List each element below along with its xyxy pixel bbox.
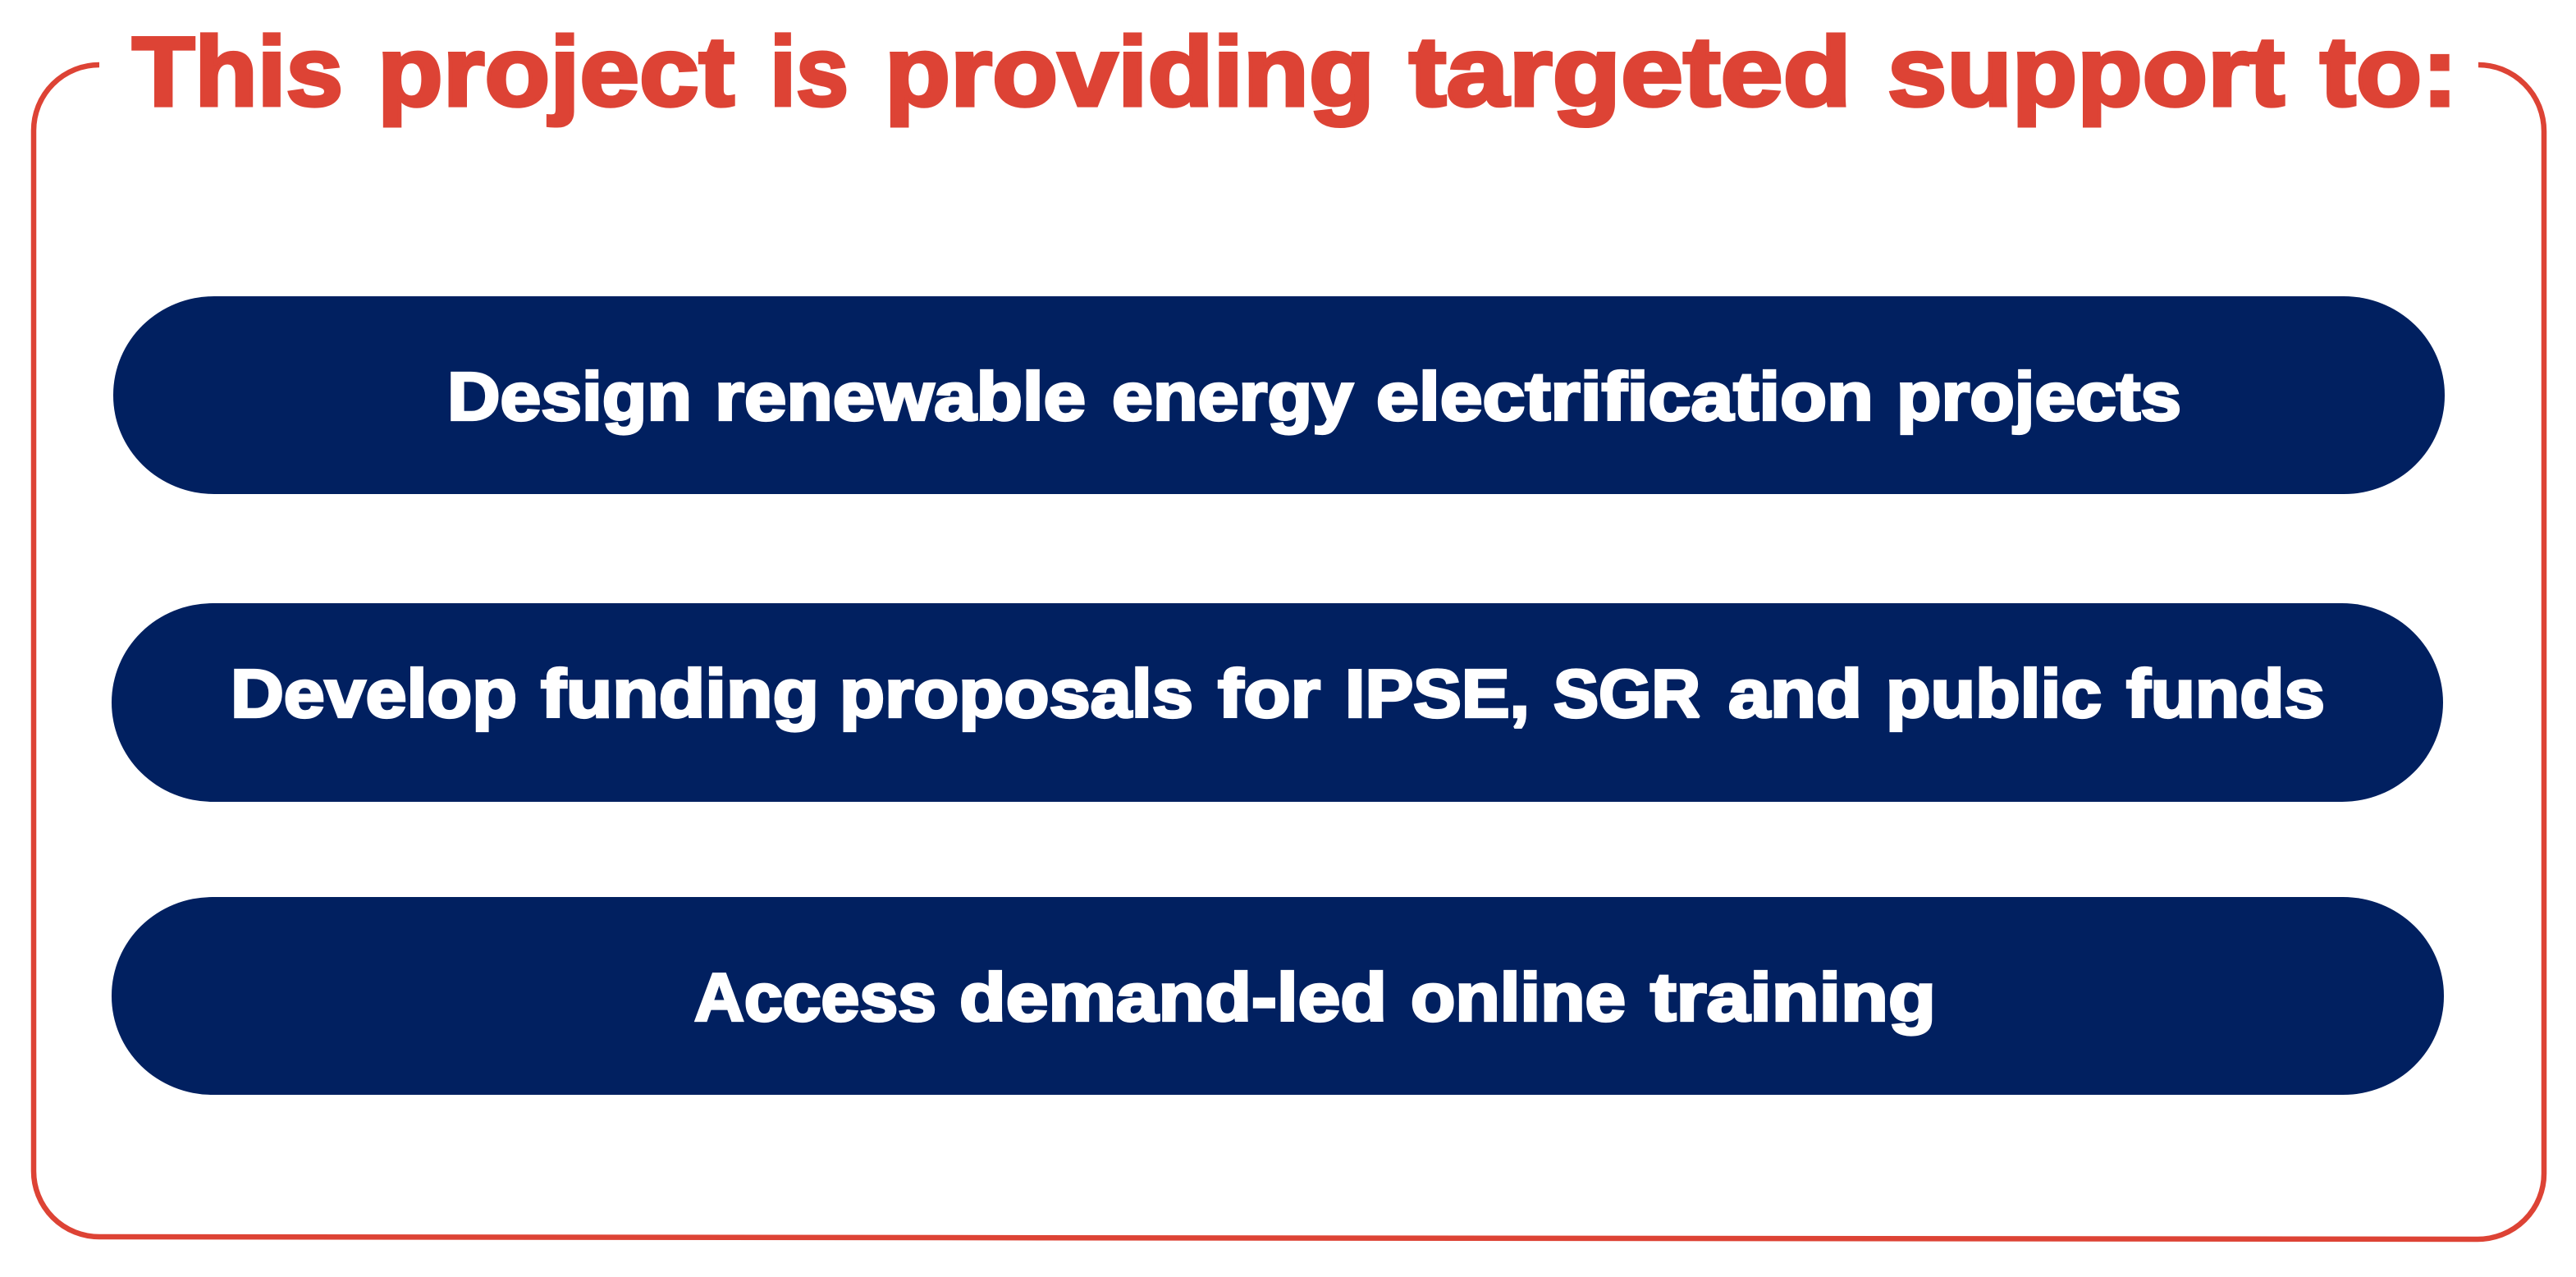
pill text: electrification: [1376, 358, 1874, 435]
title: This: [132, 16, 343, 126]
title: providing: [885, 16, 1375, 126]
pill text: online: [1411, 959, 1626, 1036]
title: to:: [2320, 16, 2458, 126]
pill text: Design: [447, 358, 692, 435]
panel: design projects pill: [113, 296, 2445, 494]
panel: online training pill: [112, 897, 2444, 1095]
pill text: funding: [541, 655, 819, 732]
pill text: projects: [1897, 358, 2181, 435]
pill text: proposals: [840, 655, 1193, 732]
pill text: Develop: [231, 655, 517, 732]
pill text: and: [1728, 655, 1862, 732]
pill background: [112, 897, 2444, 1095]
pill text: public: [1886, 655, 2102, 732]
pill text: for: [1218, 655, 1320, 732]
title: support: [1887, 16, 2285, 126]
pill text: energy: [1112, 358, 1353, 435]
pill text: demand-led: [959, 959, 1387, 1036]
title: targeted: [1409, 16, 1851, 126]
title: is: [770, 16, 849, 126]
panel: funding proposals pill: [112, 603, 2443, 802]
pill text: renewable: [715, 358, 1086, 435]
pill text: SGR: [1553, 655, 1700, 732]
pill text: training: [1650, 959, 1936, 1036]
pill background: [112, 603, 2443, 802]
pill background: [113, 296, 2445, 494]
pill text: IPSE,: [1345, 655, 1530, 732]
title: project: [377, 16, 734, 126]
pill text: funds: [2126, 655, 2325, 732]
pill text: Access: [694, 959, 936, 1036]
